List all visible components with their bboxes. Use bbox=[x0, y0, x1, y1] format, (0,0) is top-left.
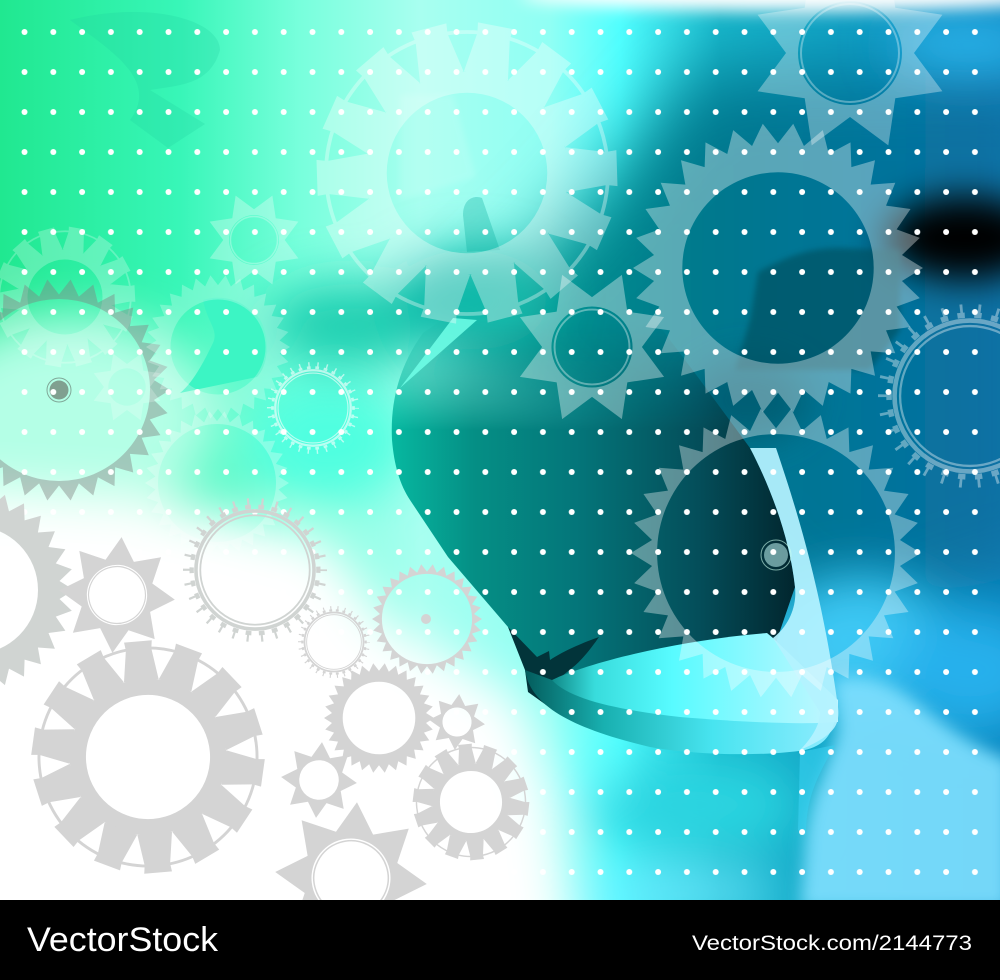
gear: left edge grey bbox=[0, 490, 74, 690]
sliver below the cup bbox=[798, 745, 835, 835]
gear: grey star bbox=[66, 537, 175, 652]
gear: star lower bbox=[281, 742, 356, 818]
gear: faint top left bbox=[0, 216, 147, 378]
streak inside top gear bbox=[400, 95, 476, 200]
gear: block small bbox=[407, 738, 535, 866]
gear pin bbox=[421, 614, 431, 624]
footer image id: VectorStock.com/2144773 bbox=[692, 931, 972, 955]
pale right corner shape bbox=[800, 677, 1000, 910]
dark stem inside top gear bbox=[463, 197, 500, 252]
pale curved band bbox=[750, 448, 838, 750]
gear: mid left bbox=[146, 275, 290, 419]
gear: star bottom bbox=[276, 802, 426, 900]
gear: thin grey large bbox=[187, 502, 323, 638]
top white glow bbox=[520, 0, 1000, 11]
gear: thin grey small bbox=[300, 608, 368, 676]
gear: upper right star bbox=[758, 0, 942, 145]
gear: grey with pin bbox=[372, 564, 482, 674]
gear: grey medium bbox=[324, 663, 434, 773]
gear: faint lower left bbox=[146, 412, 289, 540]
faint leaf shapes top left bbox=[70, 12, 220, 148]
hub on cup gear bbox=[761, 540, 791, 570]
gear: top centre large bbox=[290, 0, 644, 349]
gear: left grey toothed bbox=[0, 280, 170, 500]
gear: small star bbox=[430, 694, 485, 750]
dark shadow blob top right bbox=[885, 196, 1000, 280]
mint leaf in small gear bbox=[180, 298, 267, 393]
pale wedge above heart bbox=[400, 318, 477, 388]
gear: block large bottom left bbox=[21, 631, 275, 883]
gear: right large toothed bbox=[633, 124, 923, 412]
gear: lower right large toothed bbox=[631, 409, 921, 697]
dark shape inside upper gear bbox=[735, 248, 900, 370]
gear: small star upper left bbox=[210, 196, 298, 284]
gear: faint tiny star bbox=[94, 354, 160, 420]
gear group: translucent light gears bbox=[0, 0, 1000, 697]
soft dark area between gears bbox=[690, 360, 810, 440]
footer brand: VectorStock bbox=[27, 921, 219, 959]
cup opening ellipse bbox=[552, 633, 838, 723]
gear: centre star bbox=[520, 275, 664, 419]
teal heart shape bbox=[392, 338, 795, 676]
gear hub bbox=[47, 378, 71, 402]
footer bar bbox=[0, 900, 1000, 980]
gear: small thin bbox=[270, 365, 356, 451]
gear: right edge thin bbox=[884, 310, 1000, 482]
cup rim dark wedge bbox=[508, 627, 599, 712]
cup lower rim bbox=[525, 670, 838, 754]
gear group: grey gears bbox=[0, 495, 530, 900]
